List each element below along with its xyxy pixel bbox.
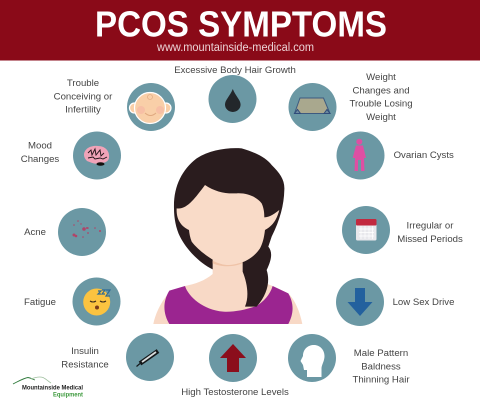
icon: red up arrow	[209, 334, 257, 382]
label: ovarian cysts: Ovarian Cysts	[394, 150, 454, 161]
logo: mountainside medical equipment: Equipment	[53, 392, 84, 398]
label: irregular periods: Irregular or	[407, 220, 453, 232]
icon: calendar	[342, 206, 390, 254]
label: weight changes: Trouble Losing	[349, 99, 413, 110]
label: irregular periods: Missed Periods	[397, 234, 463, 245]
label: excessive body hair growth: Excessive Body Hair Growth	[174, 65, 296, 76]
label: male pattern baldness: Thinning Hair	[352, 375, 410, 386]
website url: www.mountainside-medical.com	[156, 42, 314, 54]
label: insulin resistance: Resistance	[61, 359, 109, 370]
label: trouble conceiving: Trouble	[67, 78, 99, 89]
icon: blue down arrow	[336, 278, 384, 326]
label: trouble conceiving: Conceiving or	[54, 91, 113, 102]
icon: acne spots	[58, 208, 106, 256]
label: weight changes: Weight	[366, 72, 396, 83]
label: high testosterone: High Testosterone Levels	[181, 387, 289, 398]
central woman illustration	[153, 148, 302, 324]
label: male pattern baldness: Baldness	[361, 361, 401, 372]
header banner	[0, 0, 480, 60]
icon: sleeping face	[72, 278, 120, 326]
icon: brain	[73, 132, 121, 180]
label: mood changes: Mood	[28, 140, 52, 152]
label: fatigue: Fatigue	[24, 297, 56, 308]
icon: head silhouette	[288, 334, 336, 382]
icon: female figure	[336, 132, 384, 180]
label: weight changes: Changes and	[352, 85, 410, 96]
label: insulin resistance: Insulin	[71, 346, 99, 357]
icon: water drop	[208, 75, 256, 123]
label: weight changes: Weight	[366, 112, 396, 123]
label: acne: Acne	[24, 227, 46, 238]
label: low sex drive: Low Sex Drive	[393, 297, 454, 308]
icon: weight scale	[288, 83, 336, 131]
label: male pattern baldness: Male Pattern	[354, 348, 408, 359]
title: PCOS SYMPTOMS	[95, 4, 387, 44]
label: trouble conceiving: Infertility	[65, 105, 101, 116]
logo: mountainside medical equipment: Mountainside Medical	[22, 384, 83, 392]
label: mood changes: Changes	[21, 154, 59, 165]
logo: mountainside medical equipment	[13, 377, 84, 398]
icon: baby face	[127, 83, 175, 131]
icon: syringe	[126, 333, 174, 381]
